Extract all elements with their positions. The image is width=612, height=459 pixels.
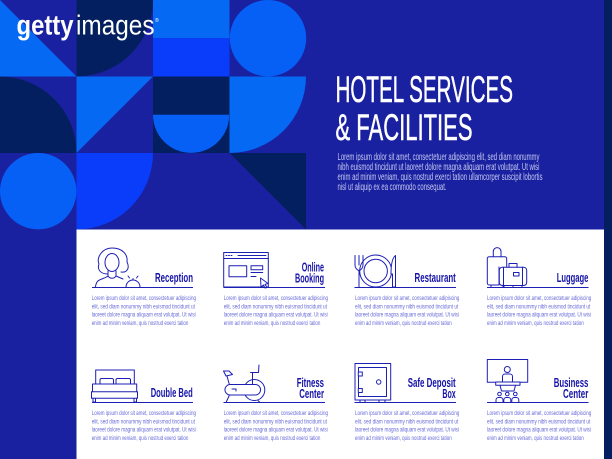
description: laoreet dolore magna aliquam erat volutpat. Ut wisi: [224, 427, 328, 434]
label: [295, 260, 324, 286]
icon: double bed: [92, 370, 138, 402]
description: Lorem ipsum dolor sit amet, consectetuer adipiscing: [224, 410, 328, 417]
description: Lorem ipsum dolor sit amet, consectetuer adipiscing: [92, 410, 196, 417]
logo: getty images: [16, 10, 159, 40]
description: elit, sed diam nonummy nibh euismod tincidunt ut: [355, 418, 458, 425]
description: [487, 410, 592, 442]
description: [224, 410, 328, 442]
description: [92, 410, 196, 442]
description: laoreet dolore magna aliquam erat volutpat. Ut wisi: [355, 427, 459, 434]
label: [554, 376, 588, 401]
item: Fitness Center: [224, 365, 328, 442]
description: enim ad minim veniam, quis nostrud exerci tation: [92, 320, 189, 327]
description: [355, 410, 460, 442]
description: Lorem ipsum dolor sit amet, consectetuer adipiscing: [92, 295, 196, 302]
icon: exercise bike: [224, 365, 265, 402]
white content panel: [76, 230, 604, 459]
label: Double Bed: [151, 386, 193, 400]
item: Luggage: [487, 248, 592, 327]
logo: getty images: getty: [16, 10, 74, 40]
description: elit, sed diam nonummy nibh euismod tincidunt ut: [224, 418, 327, 425]
label: Restaurant: [414, 271, 456, 285]
description: laoreet dolore magna aliquam erat volutpat. Ut wisi: [224, 312, 328, 319]
description: laoreet dolore magna aliquam erat volutpat. Ut wisi: [355, 312, 459, 319]
geometric pattern panel: [0, 0, 306, 230]
label: [297, 376, 324, 401]
description: laoreet dolore magna aliquam erat volutpat. Ut wisi: [92, 312, 196, 319]
icon: suitcases: [487, 248, 527, 287]
description: [355, 295, 460, 327]
description: enim ad minim veniam, quis nostrud exerci tation: [92, 435, 189, 442]
intro paragraph: [338, 152, 542, 193]
icon: plate with fork and knife: [355, 255, 396, 287]
label: Fitness: [297, 376, 324, 390]
description: Lorem ipsum dolor sit amet, consectetuer adipiscing: [355, 295, 460, 302]
label: Luggage: [557, 271, 588, 285]
description: elit, sed diam nonummy nibh euismod tincidunt ut: [224, 303, 327, 310]
description: [487, 295, 592, 327]
description: Lorem ipsum dolor sit amet, consectetuer adipiscing: [224, 295, 328, 302]
label: Booking: [295, 272, 324, 286]
logo: getty images: images: [76, 10, 154, 40]
icon: receptionist with bell: [96, 248, 140, 287]
description: elit, sed diam nonummy nibh euismod tincidunt ut: [92, 418, 195, 425]
label: Reception: [155, 271, 193, 285]
description: enim ad minim veniam, quis nostrud exerci tation: [355, 320, 452, 327]
title: [336, 69, 513, 148]
label: Box: [442, 387, 456, 401]
item: Business Center: [487, 360, 592, 442]
description: enim ad minim veniam, quis nostrud exerci tation: [355, 435, 452, 442]
label: Online: [302, 260, 324, 274]
icon: safe: [355, 364, 391, 402]
description: enim ad minim veniam, quis nostrud exerci tation: [224, 320, 321, 327]
label: Safe Deposit: [408, 376, 456, 390]
label: Business: [554, 376, 588, 390]
title: & FACILITIES: [336, 107, 472, 148]
label: Center: [299, 387, 324, 401]
description: enim ad minim veniam, quis nostrud exerci tation: [224, 435, 321, 442]
description: [92, 295, 196, 327]
description: elit, sed diam nonummy nibh euismod tincidunt ut: [355, 303, 458, 310]
intro paragraph: nisl ut aliquip ex ea commodo consequat.: [338, 182, 446, 193]
description: elit, sed diam nonummy nibh euismod tincidunt ut: [92, 303, 195, 310]
item: Restaurant: [354, 255, 460, 327]
description: Lorem ipsum dolor sit amet, consectetuer adipiscing: [355, 410, 460, 417]
logo: getty images: ®: [155, 17, 159, 24]
description: laoreet dolore magna aliquam erat volutpat. Ut wisi: [92, 427, 196, 434]
item: Safe Deposit Box: [354, 364, 460, 442]
item: Double Bed: [92, 370, 196, 442]
icon: presenter and audience: [487, 360, 528, 402]
item: Reception: [92, 248, 196, 327]
icon: browser window with cursor: [224, 252, 268, 288]
description: [224, 295, 328, 327]
label: [408, 376, 456, 401]
label: Center: [563, 387, 588, 401]
item: Online Booking: [224, 252, 328, 327]
